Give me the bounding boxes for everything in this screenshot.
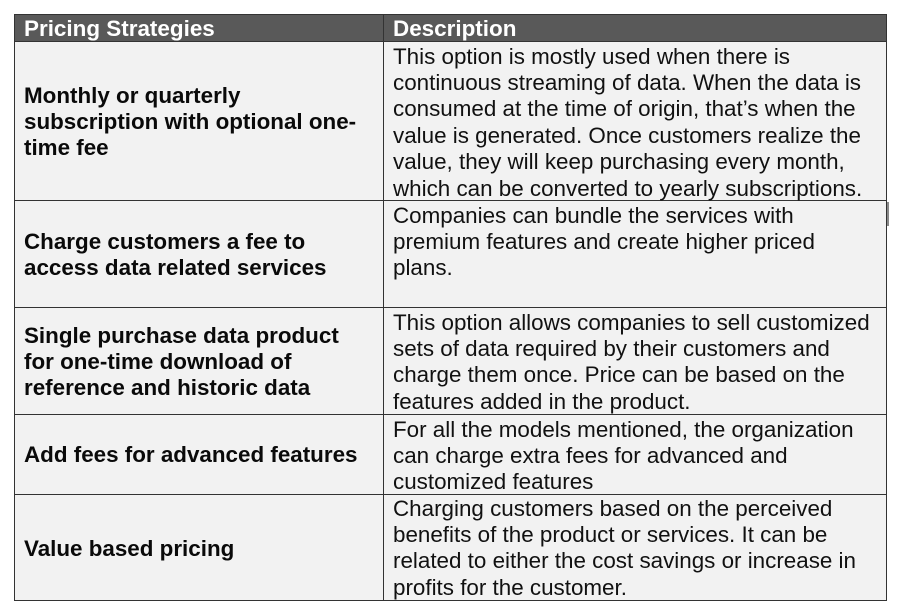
header: pricing strategies: Pricing Strategies [24, 16, 215, 41]
stray cursor mark at right edge [887, 202, 889, 226]
row 2 description [393, 202, 815, 280]
header: description: Description [393, 16, 516, 41]
row 1 description: continuous streaming of data. When the data is [393, 70, 861, 95]
row 1 description: which can be converted to yearly subscriptions. [393, 176, 862, 201]
row 4 description: For all the models mentioned, the organization [393, 416, 854, 442]
row 2 description: premium features and create higher priced [393, 229, 815, 254]
row 3 strategy [24, 322, 339, 400]
row 4 strategy: Add fees for advanced features [24, 442, 357, 467]
row 2 description: plans. [393, 255, 453, 280]
row 1 description: consumed at the time of origin, that’s when the [393, 96, 856, 121]
row 3 description: charge them once. Price can be based on the [393, 362, 845, 387]
row 5 description [393, 496, 856, 600]
row 3 description: features added in the product. [393, 389, 691, 414]
row 1 strategy: Monthly or quarterly [24, 82, 240, 108]
row 3 strategy: for one-time download of [24, 349, 291, 374]
row 4 description: customized features [393, 469, 593, 494]
row 3 strategy: reference and historic data [24, 375, 310, 400]
row 5 description: benefits of the product or services. It can be [393, 522, 827, 547]
row 3 description [393, 310, 870, 414]
row 3 description: sets of data required by their customers and [393, 336, 830, 361]
row 2 strategy: access data related services [24, 255, 326, 280]
row 1 description: value is generated. Once customers realize the [393, 123, 861, 148]
row 3 strategy: Single purchase data product [24, 322, 339, 348]
row 4 description [393, 416, 854, 494]
row 1 description: This option is mostly used when there is [393, 44, 790, 68]
row 5 description: Charging customers based on the perceived [393, 496, 832, 520]
row 1 strategy [24, 82, 356, 160]
row 5 description: profits for the customer. [393, 575, 627, 600]
row 4 description: can charge extra fees for advanced and [393, 443, 788, 468]
row 5 description: related to either the cost savings or increase in [393, 548, 856, 573]
row 1 description [393, 44, 862, 201]
row 1 strategy: subscription with optional one- [24, 109, 356, 134]
row 5 strategy: Value based pricing [24, 536, 234, 560]
table header row [14, 14, 887, 41]
row 3 description: This option allows companies to sell customized [393, 310, 870, 334]
row 2 strategy [24, 228, 326, 280]
row 2 strategy: Charge customers a fee to [24, 228, 305, 254]
row 2 description: Companies can bundle the services with [393, 202, 794, 228]
row 1 description: value, they will keep purchasing every month, [393, 149, 845, 174]
row 1 strategy: time fee [24, 135, 109, 160]
